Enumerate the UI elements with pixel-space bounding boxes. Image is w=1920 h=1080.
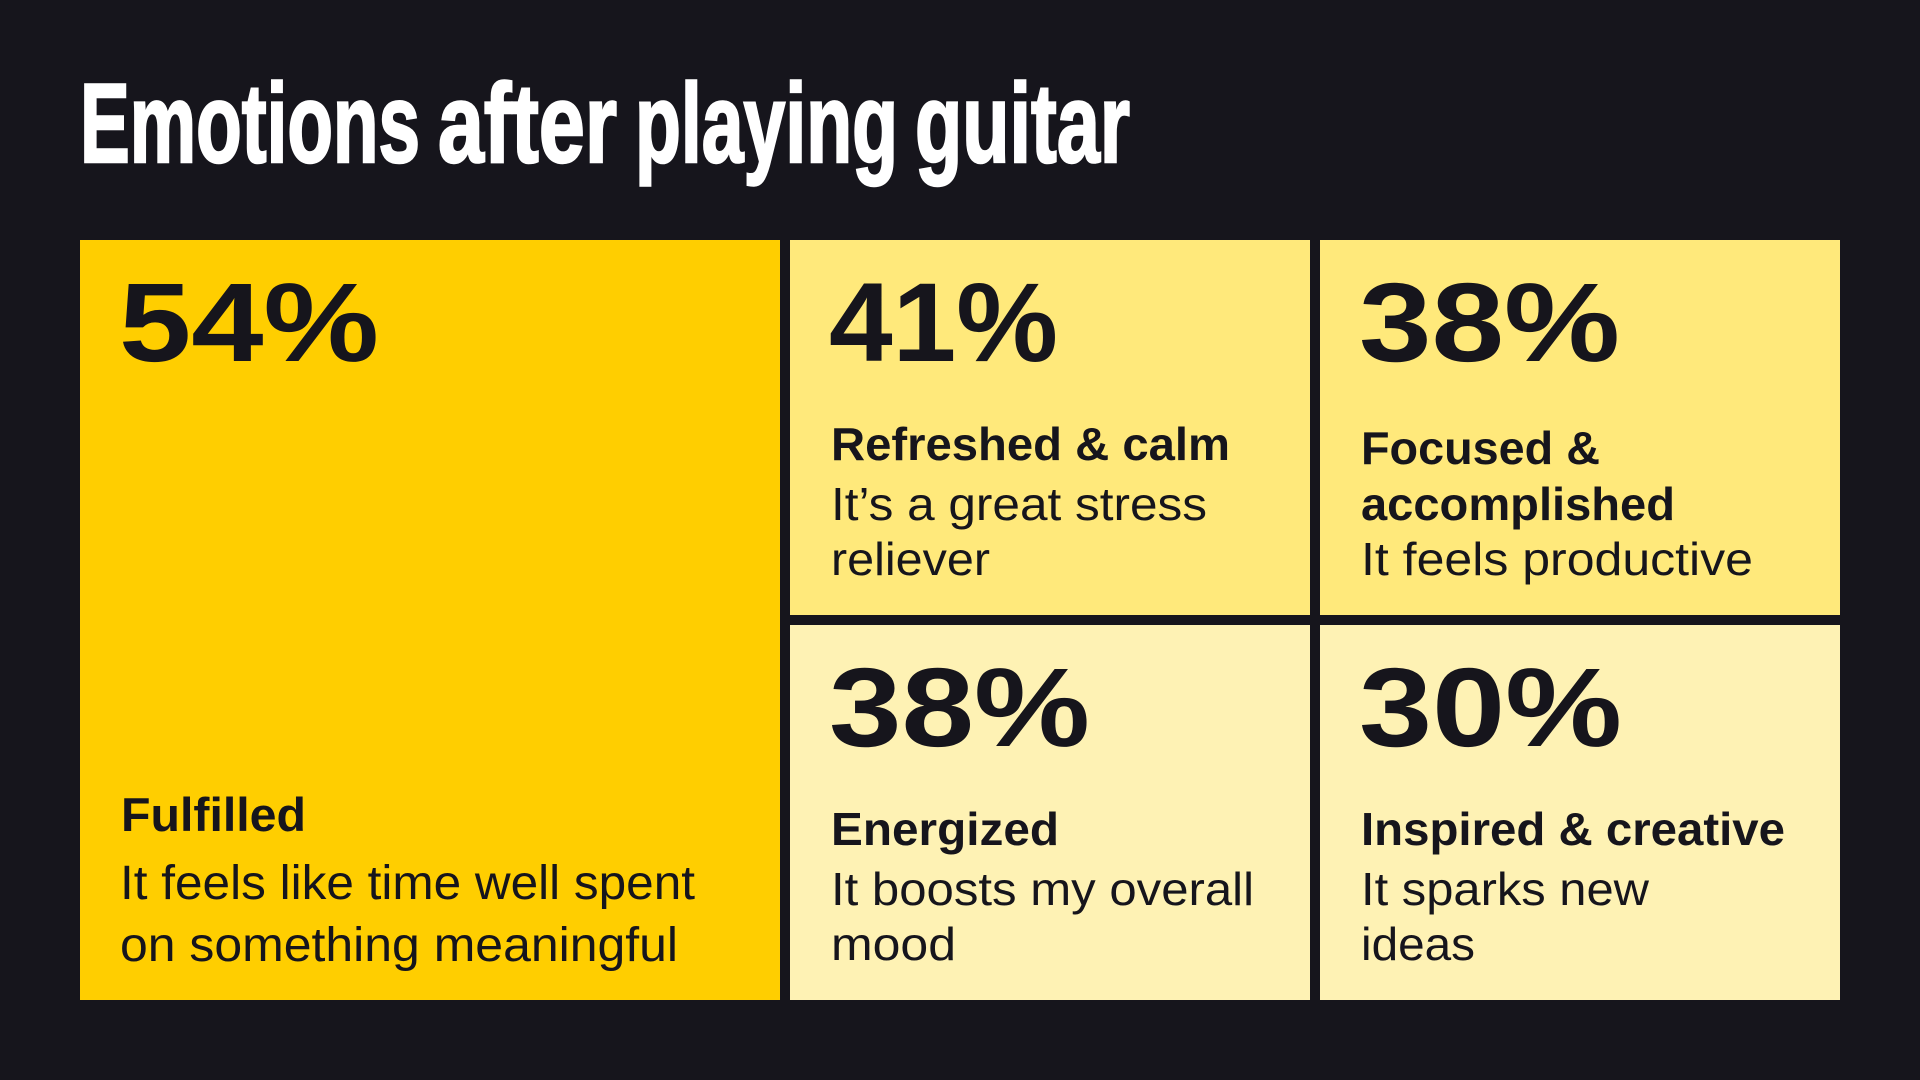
description: inspired: It sparks new — [1361, 863, 1650, 915]
description: fulfilled: on something meaningful — [120, 919, 678, 972]
percentage: 41%: 41% — [829, 260, 1058, 385]
panel: inspired and creative 30% — [1320, 625, 1840, 1000]
description: energized — [831, 863, 1254, 970]
title: Emotions — [80, 61, 420, 186]
title — [80, 61, 1130, 186]
description: inspired: ideas — [1361, 918, 1475, 970]
percentage: 54%: 54% — [119, 260, 379, 385]
label: Focused & accomplished: Focused & — [1361, 422, 1600, 474]
description: focused: It feels productive — [1361, 533, 1753, 585]
panel: focused and accomplished 38% — [1320, 240, 1840, 615]
label: Refreshed & calm: Refreshed & calm — [831, 418, 1230, 470]
panel: fulfilled 54% — [80, 240, 780, 1000]
title: guitar — [915, 61, 1130, 186]
label: Focused & accomplished: accomplished — [1361, 478, 1675, 530]
description: fulfilled: It feels like time well spent — [120, 857, 695, 910]
percentage: 30%: 30% — [1359, 645, 1622, 770]
description: inspired — [1361, 863, 1650, 970]
description: energized: mood — [831, 918, 956, 970]
description: energized: It boosts my overall — [831, 863, 1254, 915]
label: Fulfilled: Fulfilled — [121, 788, 306, 841]
panel: energized 38% — [790, 625, 1310, 1000]
description: refreshed: It’s a great stress — [831, 478, 1207, 530]
percentage: 38%: 38% — [1359, 260, 1620, 385]
description: refreshed: reliever — [831, 533, 990, 585]
description: fulfilled — [120, 857, 695, 972]
label: Energized: Energized — [831, 803, 1059, 855]
description: refreshed — [831, 478, 1207, 585]
percentage: 38%: 38% — [829, 645, 1090, 770]
label: Focused & accomplished — [1361, 422, 1675, 530]
label: Inspired & creative: Inspired & creative — [1361, 803, 1785, 855]
title: playing — [635, 61, 898, 186]
panel: refreshed and calm 41% — [790, 240, 1310, 615]
title: after — [438, 61, 617, 186]
